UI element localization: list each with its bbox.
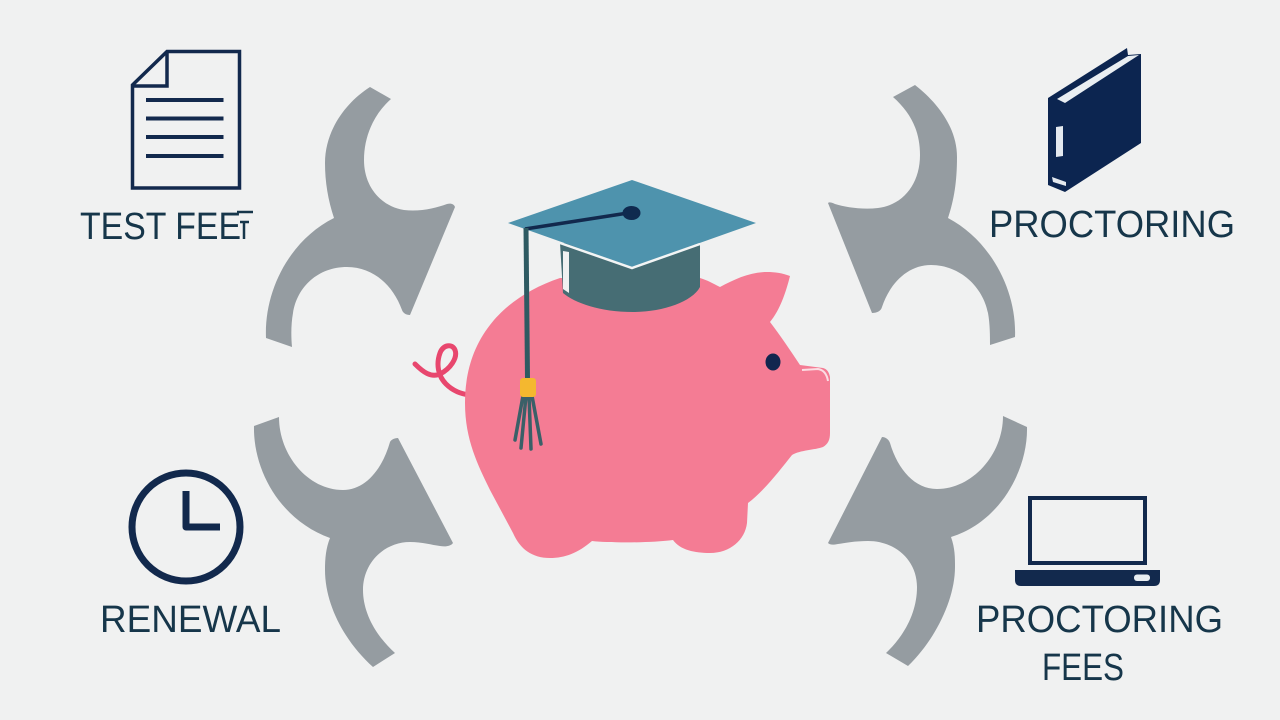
- arrow: bottom-left: [254, 417, 453, 667]
- icon: clock: [132, 473, 240, 581]
- label: test fee: TEST FEE: [80, 206, 241, 248]
- tassel cord: [526, 228, 528, 379]
- label: proctoring fees: FEES: [1042, 647, 1124, 689]
- pig snout highlight: [802, 369, 828, 381]
- tassel knot: [520, 378, 536, 397]
- label: renewal: RENEWAL: [100, 599, 281, 641]
- icon: document: [132, 52, 240, 188]
- tassel fringe: [515, 396, 541, 449]
- cap cord: [525, 213, 628, 229]
- cap button: [622, 206, 640, 220]
- cap base: [560, 243, 700, 312]
- pig tail: [415, 346, 470, 395]
- icon: book: [1048, 48, 1141, 192]
- cap board lower edge highlight: [560, 243, 700, 268]
- pig body: [465, 272, 830, 558]
- cap base highlight: [563, 251, 569, 293]
- arrow: top-right: [828, 85, 1015, 345]
- pig eye: [766, 354, 780, 370]
- label: proctoring: PROCTORING: [989, 204, 1235, 246]
- label: proctoring fees: [976, 599, 1223, 689]
- cap board: [508, 180, 756, 267]
- illustration: piggy bank with graduation cap: [415, 180, 830, 558]
- icon: laptop: [1015, 498, 1160, 586]
- arrow: bottom-right: [828, 416, 1027, 666]
- arrow: top-left: [266, 87, 455, 347]
- label: proctoring fees: PROCTORING: [976, 599, 1223, 641]
